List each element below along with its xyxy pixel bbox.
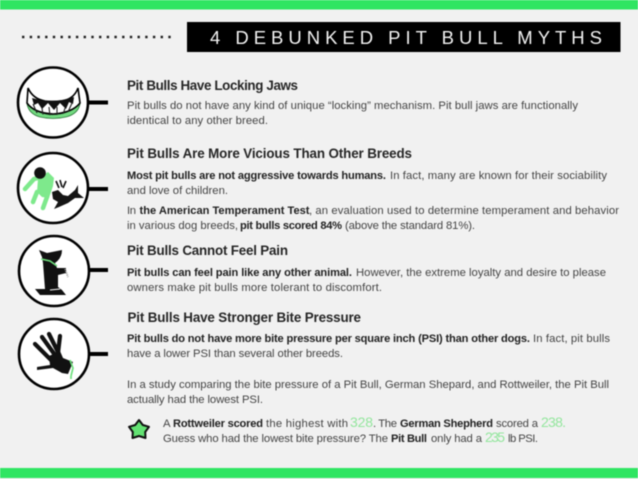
callout: bite pressure scores: Pit Bull: [391, 433, 427, 445]
icon: bitten hand: [19, 319, 108, 389]
text: pain body: owners make pit bulls more tolerant to discomfort.: [127, 282, 382, 294]
callout: bite pressure scores: only had a: [431, 433, 483, 445]
myth 1: [127, 78, 578, 127]
text: pain body: [127, 267, 606, 294]
icon: dog attacking person: [18, 153, 108, 223]
myth 2: [127, 146, 619, 232]
callout: bite pressure scores: 235: [485, 429, 505, 445]
text: vicious body: pit bulls scored 84%: [240, 220, 342, 232]
dotted leader line: [22, 36, 176, 38]
callout: bite pressure scores: scored a: [496, 418, 539, 430]
callout: bite pressure scores: lb PSI.: [508, 433, 538, 445]
icon: dog standing: [19, 236, 108, 306]
text: pain body: However, the extreme loyalty and desire to please: [356, 267, 606, 279]
text: locking jaws body: Pit bulls do not have any kind of unique “locking” mechanism. Pit bull jaws are functionally: [127, 100, 578, 112]
text: vicious body: [127, 170, 619, 232]
callout: bite pressure scores: [163, 414, 566, 445]
callout: bite pressure scores: 238.: [541, 414, 566, 430]
callout: bite pressure scores: Guess who had the lowest bite pressure? The: [163, 433, 388, 445]
text: bite pressure body: Pit bulls do not have more bite pressure per square inch (PSI) than other dogs.: [127, 333, 530, 345]
text: locking jaws body: [127, 100, 578, 127]
heading: bite pressure: Pit Bulls Have Stronger Bite Pressure: [128, 310, 361, 325]
text: vicious body: In fact, many are known for their sociability: [390, 170, 607, 182]
text: vicious body: Most pit bulls are not aggressive towards humans.: [127, 170, 386, 182]
text: vicious body: (above the standard 81%).: [345, 220, 475, 232]
bottom green bar: [0, 468, 638, 478]
heading: more vicious: Pit Bulls Are More Vicious Than Other Breeds: [127, 146, 412, 161]
heading: cannot feel pain: Pit Bulls Cannot Feel Pain: [127, 243, 288, 258]
icon: teeth: [18, 68, 108, 138]
text: vicious body: and love of children.: [127, 185, 228, 197]
text: locking jaws body: identical to any other breed.: [127, 115, 268, 127]
text: bite pressure body: have a lower PSI than several other breeds.: [127, 348, 343, 360]
text: bite pressure body: In fact, pit bulls: [533, 333, 610, 345]
callout: bite pressure scores: German Shepherd: [400, 418, 493, 430]
icon: star: [129, 420, 149, 438]
callout: bite pressure scores: Rottweiler scored: [173, 418, 263, 430]
title banner: [187, 22, 620, 52]
text: vicious body: in various dog breeds,: [127, 220, 238, 232]
callout: bite pressure scores: A: [163, 418, 171, 430]
callout: bite pressure scores: . The: [373, 418, 397, 430]
title banner: 4 DEBUNKED PIT BULL MYTHS: [210, 27, 602, 48]
callout: bite pressure scores: 328: [350, 414, 373, 430]
text: vicious body: , an evaluation used to determine temperament and behavior: [309, 205, 619, 217]
text: bite pressure body: In a study comparing the bite pressure of a Pit Bull, German Shepard, and Rottweiler, the Pit Bull: [127, 379, 609, 391]
text: vicious body: the American Temperament Test: [140, 205, 310, 217]
heading: locking jaws: Pit Bulls Have Locking Jaws: [127, 78, 298, 93]
myth 4: [127, 310, 610, 406]
text: bite pressure body: actually had the lowest PSI.: [127, 394, 263, 406]
top green bar: [0, 0, 638, 10]
text: pain body: Pit bulls can feel pain like any other animal.: [127, 267, 352, 279]
myth 3: [127, 243, 606, 294]
callout: bite pressure scores: the highest with: [266, 418, 348, 430]
text: vicious body: In: [127, 205, 136, 217]
text: bite pressure body: [127, 333, 610, 406]
